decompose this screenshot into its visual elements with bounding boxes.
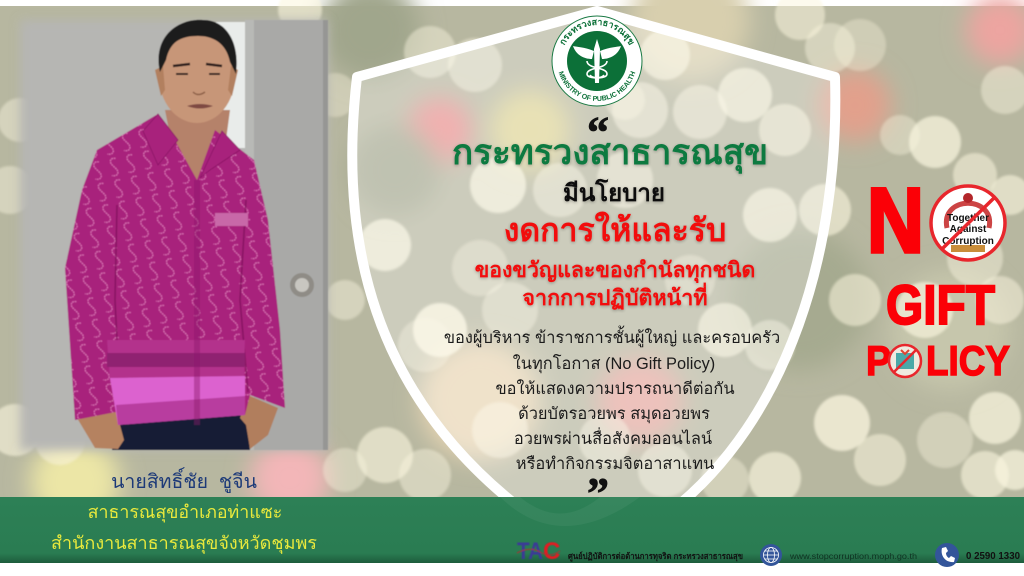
body text: อวยพรผ่านสื่อสังคมออนไลน์	[514, 427, 712, 448]
opening quote mark: “	[587, 108, 609, 157]
mouth	[187, 104, 213, 108]
person name: นายสิทธิ์ชัย ชูจีน	[111, 467, 257, 494]
icon: telephone	[935, 543, 959, 567]
website: www.stopcorruption.moph.go.th	[789, 551, 917, 561]
word LICY: LICY	[926, 337, 1010, 384]
phone number: 0 2590 1330	[966, 550, 1020, 562]
panel: shield	[352, 11, 835, 512]
body text	[444, 325, 780, 473]
trousers	[112, 412, 250, 450]
subtitle: has policy: มีนโยบาย	[563, 178, 665, 207]
heading: gifts line 2: จากการปฏิบัติหน้าที่	[522, 282, 708, 310]
body text: ของผู้บริหาร ข้าราชการชั้นผู้ใหญ่ และครอบครัว	[444, 325, 780, 348]
center name: ศูนย์ปฏิบัติการต่อต้านการทุจริต กระทรวงสาธารณสุข	[568, 551, 743, 562]
heading: no giving and receiving: งดการให้และรับ	[504, 211, 726, 248]
ears	[155, 66, 238, 96]
no-symbol basket icon: Corruption	[942, 236, 994, 247]
shirt hem bands	[107, 340, 245, 425]
neck	[165, 110, 230, 182]
photo wall	[20, 20, 328, 450]
hair	[159, 20, 237, 74]
green footer band	[0, 497, 1024, 563]
no-symbol basket icon: Together	[947, 213, 989, 224]
ministry of public health logo	[552, 16, 642, 106]
body text: หรือทำกิจกรรมจิตอาสาแทน	[516, 455, 714, 473]
shirt	[65, 114, 285, 423]
no gift policy wordmark	[866, 170, 1010, 384]
TAC logo	[517, 538, 560, 565]
letter N: N	[867, 170, 924, 272]
shirt pocket	[215, 213, 248, 226]
TAC logo: TA	[517, 538, 543, 565]
no-symbol gift icon	[889, 345, 921, 377]
closing quote mark: ”	[587, 469, 609, 518]
icon: globe	[760, 544, 782, 566]
TAC logo: C	[543, 538, 560, 565]
ministry of public health logo: กระทรวงสาธารณสุข	[560, 19, 634, 46]
position line 1: สาธารณสุขอำเภอท่าแซะ	[88, 502, 282, 523]
collar	[143, 114, 240, 178]
position line 2: สำนักงานสาธารณสุขจังหวัดชุมพร	[51, 533, 317, 554]
door	[245, 20, 328, 450]
body text: ขอให้แสดงความปรารถนาดีต่อกัน	[495, 379, 735, 398]
no-symbol basket icon	[931, 186, 1005, 260]
window strip	[216, 22, 245, 148]
no-symbol basket icon: Against	[950, 224, 987, 235]
word P: P	[866, 337, 891, 384]
face	[159, 29, 235, 123]
title: ministry: กระทรวงสาธารณสุข	[452, 133, 768, 174]
word GIFT: GIFT	[886, 273, 995, 336]
ministry of public health logo: MINISTRY OF PUBLIC HEALTH	[558, 71, 636, 101]
right hand	[240, 395, 278, 449]
heading: gifts line 1: ของขวัญและของกำนัลทุกชนิด	[475, 258, 755, 284]
eyes and brows	[173, 64, 222, 66]
left hand	[77, 410, 124, 449]
body text: ด้วยบัตรอวยพร สมุดอวยพร	[518, 405, 710, 424]
photo: man in pink shirt	[20, 20, 328, 450]
shirt placket	[194, 180, 200, 425]
sleeve shadows	[115, 200, 248, 392]
nose	[193, 92, 205, 94]
body text: ในทุกโอกาส (No Gift Policy)	[513, 354, 715, 374]
